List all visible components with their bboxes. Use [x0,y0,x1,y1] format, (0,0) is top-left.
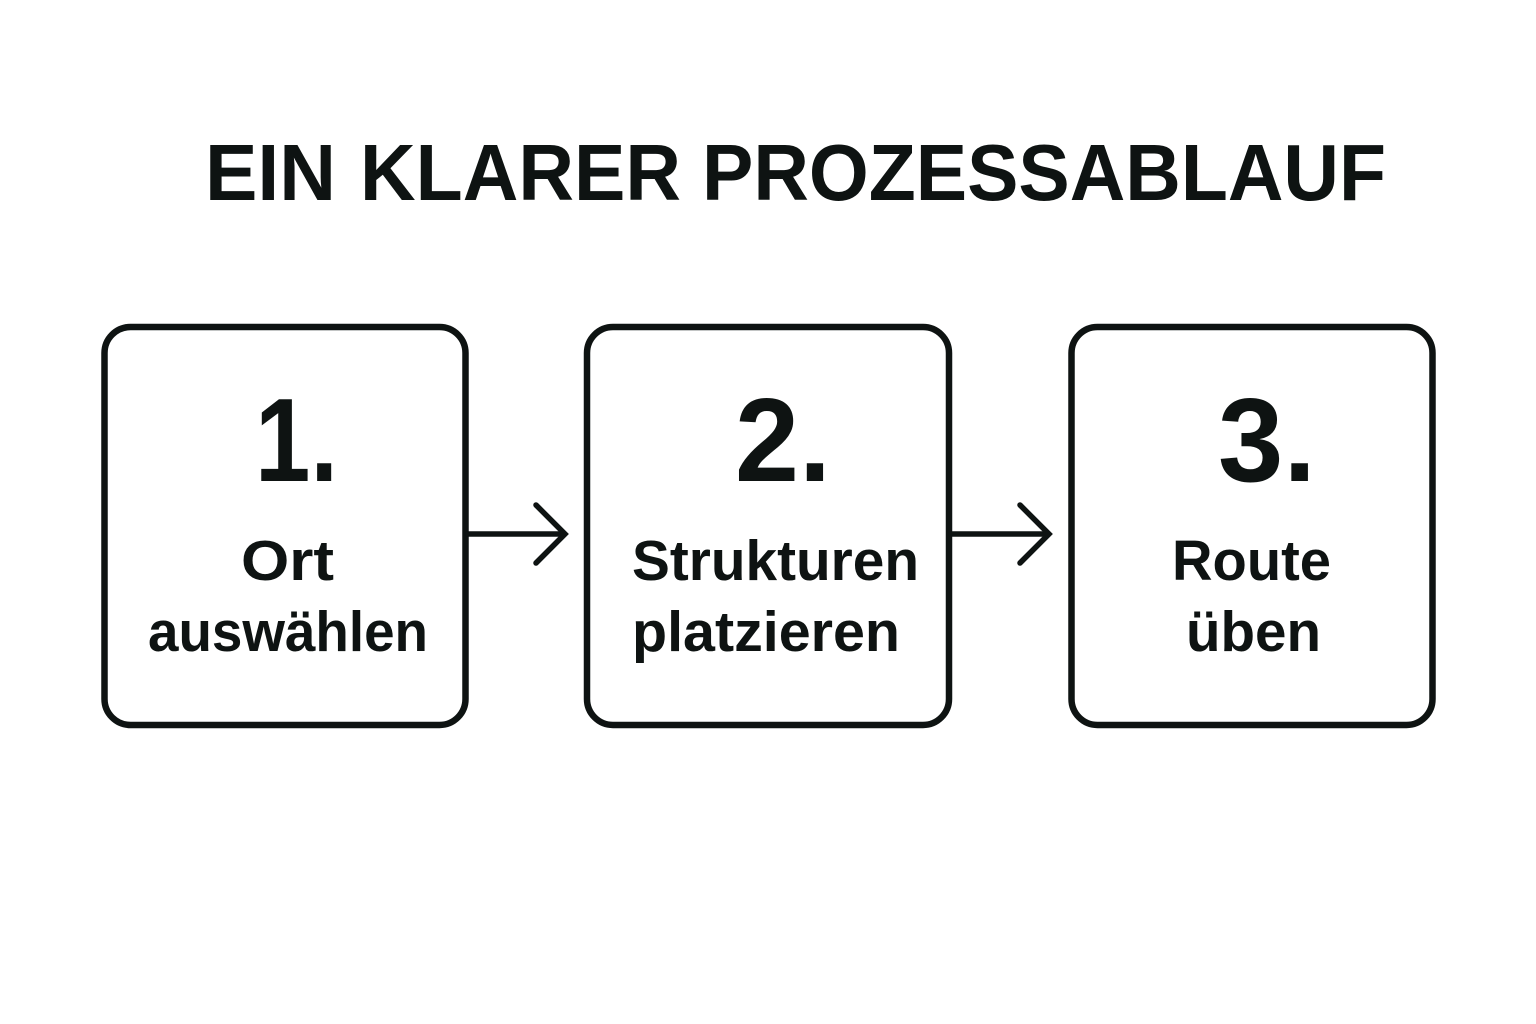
panel: step 3 [1072,327,1432,725]
arrow: step 1 to step 2 [468,505,565,563]
step 1 label [148,529,428,664]
step 2 label [632,529,919,664]
step 2 label: Strukturen [632,529,919,593]
panel: step 1 [104,327,466,725]
step 1 number: 1. [255,374,338,507]
step 3 number: 3. [1218,374,1316,507]
step 3 label: Route [1172,529,1331,593]
step 1 label: Ort [241,529,334,593]
panel: step 2 [587,327,949,725]
step 1 label: auswählen [148,600,428,664]
step 3 label [1172,529,1331,664]
arrow: step 2 to step 3 [951,505,1049,563]
title: PROZESSABLAUF [702,128,1386,217]
title: KLARER [360,128,681,217]
title [205,128,1386,217]
title: EIN [205,128,336,217]
step 2 label: platzieren [632,600,900,664]
step 2 number: 2. [735,374,831,507]
step 3 label: üben [1186,600,1321,664]
